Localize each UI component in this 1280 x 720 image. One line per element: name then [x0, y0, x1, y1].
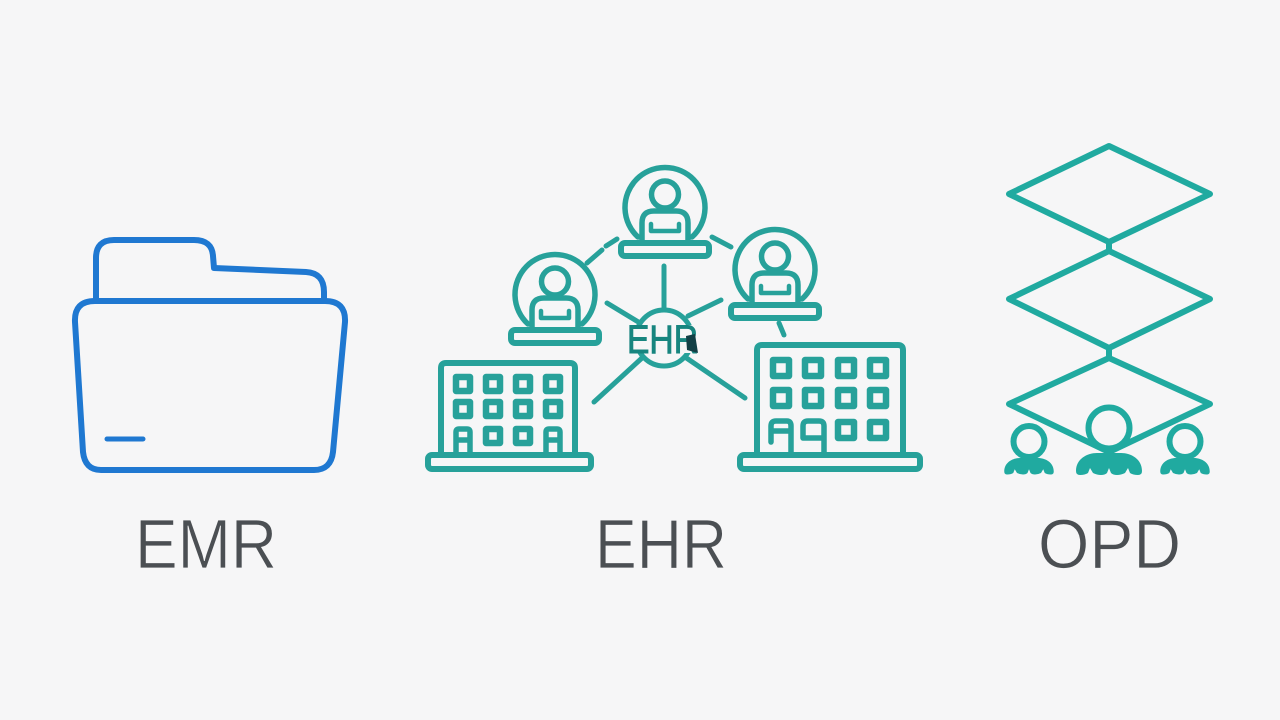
icon: right laptop with grid — [740, 345, 920, 469]
label: OPD: OPD — [1038, 505, 1181, 583]
label: EMR: EMR — [135, 505, 277, 583]
label: EHR: EHR — [595, 505, 727, 583]
icon: person station right — [731, 229, 819, 318]
icon: blue folder — [75, 240, 345, 470]
icon: central EHR hub: EHR — [627, 318, 698, 362]
icon: stacked diamonds — [1009, 146, 1210, 452]
icon: group of people — [1004, 408, 1210, 475]
network connector lines — [587, 237, 784, 402]
icon: central EHR hub — [627, 310, 698, 366]
panel: EHR — [428, 167, 920, 583]
icon: person station left — [511, 254, 599, 343]
icon: person station top — [621, 167, 709, 256]
icon: left laptop with grid — [428, 363, 591, 469]
panel: OPD — [1004, 146, 1210, 583]
panel: EMR — [75, 240, 345, 583]
